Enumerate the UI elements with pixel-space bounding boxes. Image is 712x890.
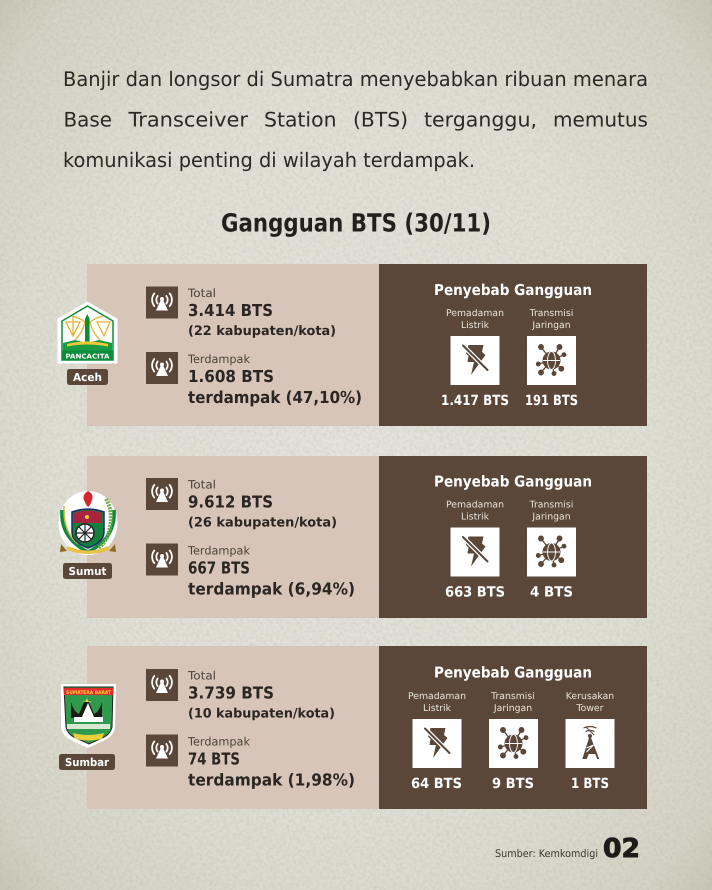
cause: power outage Sumut: Listrik [461,512,490,522]
intro text block [63,67,648,172]
logo: Sumbar: SUMATERA BARAT [66,690,112,696]
icon: affected tower Sumbar [146,734,178,766]
heading: causes Sumut: Penyebab Gangguan [434,472,592,490]
cause: power outage Sumbar: Pemadaman [408,691,466,702]
logo: Sumbar [61,684,116,748]
icon: total tower Sumbar [146,669,178,701]
intro text block: terganggu, [424,108,537,132]
label: Sumut [63,563,112,579]
total stats Sumbar: (10 kabupaten/kota) [188,706,335,722]
affected stats Sumut: terdampak (6,94%) [188,580,355,598]
total stats Aceh [187,286,336,339]
title: Gangguan BTS (30/11) [221,208,491,238]
affected stats Aceh: terdampak (47,10%) [188,388,362,407]
label: Sumbar [59,754,115,770]
page number: 02 [603,834,640,864]
intro text block: Transceiver [127,108,249,132]
affected stats Sumbar: 74 BTS [188,750,240,768]
total stats Sumbar [187,668,335,722]
affected stats Sumbar [187,734,355,790]
total stats Aceh: Total [187,286,216,300]
cause: power outage Sumut [445,500,505,600]
total stats Sumut: 9.612 BTS [188,492,273,512]
cause: transmission Sumut: Transmisi [529,500,573,510]
affected stats Sumut [187,544,355,598]
cause: power outage Sumbar: 64 BTS [411,776,462,792]
cause: transmission Sumut: 4 BTS [530,584,573,600]
cause: power outage Aceh: Pemadaman [446,308,504,319]
affected stats Sumut: Terdampak [187,544,250,558]
source note: Sumber: Kemkomdigi [495,848,598,860]
cause: transmission Sumbar: 9 BTS [492,776,534,792]
cause: power outage Sumut: Pemadaman [446,500,504,510]
cause: tower damage Sumbar [566,691,614,792]
total stats Sumut: (26 kabupaten/kota) [188,516,337,530]
total stats Sumbar: Total [187,668,216,682]
total stats Aceh: (22 kabupaten/kota) [188,324,336,339]
total stats Sumut: Total [187,478,216,492]
affected stats Aceh [187,352,362,407]
cause: tower damage Sumbar: Kerusakan [566,691,614,702]
cause: power outage Sumut: 663 BTS [445,584,505,600]
intro text block: Banjir dan longsor di Sumatra menyebabkan ribuan menara [63,67,648,91]
affected stats Sumbar: terdampak (1,98%) [188,770,355,790]
total stats Sumut [187,478,337,530]
cause: transmission Aceh: Jaringan [531,320,571,331]
cause: transmission Sumbar: Jaringan [493,703,532,714]
affected stats Aceh: Terdampak [187,352,250,366]
cause: transmission Aceh: Transmisi [529,308,573,319]
cause: transmission Sumut [527,500,576,600]
label: Sumut: Sumut [68,565,106,578]
intro text block: memutus [553,108,648,132]
intro text block: Base [64,108,112,132]
total stats Sumbar: 3.739 BTS [188,684,274,702]
heading: causes Aceh: Penyebab Gangguan [434,281,592,299]
affected stats Sumbar: Terdampak [187,734,250,748]
cause: transmission Sumut: Jaringan [531,512,571,522]
cause: power outage Sumbar: Listrik [423,703,452,714]
intro text block: (BTS) [353,108,408,132]
logo: Aceh [58,302,117,363]
icon: affected tower Aceh [146,352,178,384]
intro text block: Station [264,108,336,132]
label: Aceh [67,369,108,385]
intro text block: komunikasi penting di wilayah terdampak. [63,148,475,172]
cause: tower damage Sumbar: 1 BTS [571,776,609,792]
cause: power outage Aceh: Listrik [461,320,490,331]
cause: transmission Aceh [525,308,578,409]
affected stats Aceh: 1.608 BTS [188,367,274,386]
logo: Aceh: PANCACITA [66,352,110,360]
cause: tower damage Sumbar: Tower [576,703,604,714]
total stats Aceh: 3.414 BTS [188,301,273,320]
affected stats Sumut: 667 BTS [188,558,250,578]
cause: transmission Sumbar [489,691,538,792]
cause: transmission Aceh: 191 BTS [525,393,578,409]
label: Sumbar: Sumbar [65,756,110,769]
icon: affected tower Sumut [146,544,178,576]
panel: Sumbar [87,646,647,809]
cause: power outage Aceh: 1.417 BTS [441,393,509,409]
cause: power outage Aceh [441,308,509,409]
label: Aceh: Aceh [73,371,102,384]
cause: transmission Sumbar: Transmisi [490,691,535,702]
panel: Sumut [87,456,647,618]
cause: power outage Sumbar [408,691,466,792]
icon: total tower Aceh [146,286,178,318]
heading: causes Sumbar: Penyebab Gangguan [434,664,592,682]
logo: Sumut [58,491,118,555]
panel: Aceh [87,264,647,426]
icon: total tower Sumut [146,478,178,510]
